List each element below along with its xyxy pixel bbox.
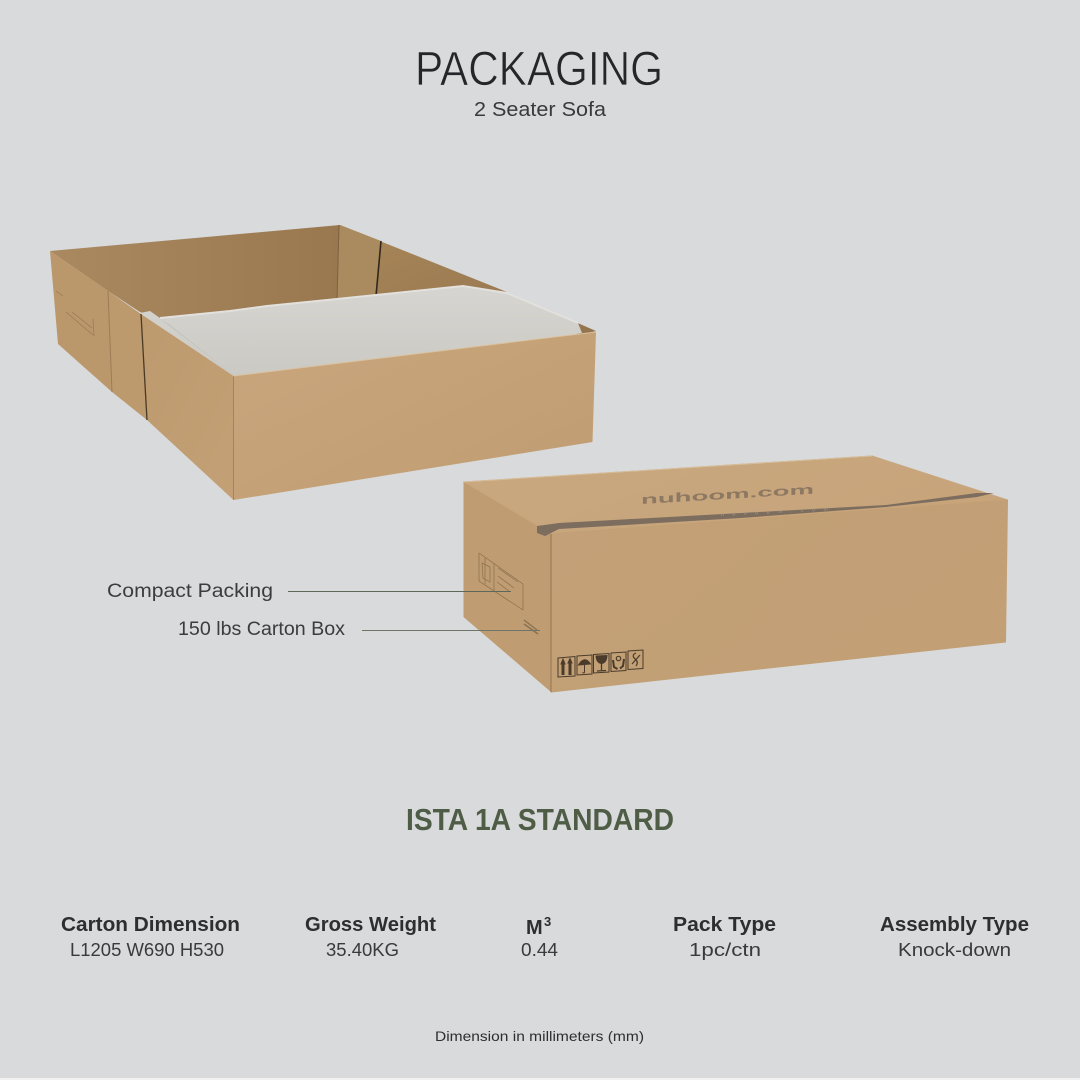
wrapped sofa sheet: [140, 286, 582, 376]
spec: cubic metres: M: [526, 917, 543, 939]
icon: this way up: [558, 656, 575, 677]
callout: carton box: 150 lbs Carton Box: [178, 619, 346, 640]
handling icons: [558, 650, 643, 677]
left side panels: [50, 251, 112, 392]
spec: cubic metres: [521, 914, 558, 960]
icon: keep dry: [577, 655, 592, 675]
box top: [464, 456, 1008, 534]
icon: handle with care: [611, 652, 626, 672]
footnote: Dimension in millimeters (mm): [435, 1028, 644, 1044]
side print marks: [56, 291, 94, 336]
spec: cubic metres: 3: [544, 914, 551, 929]
box left side: [464, 482, 551, 692]
tape print: nuhoom.com: [721, 506, 828, 518]
title: PACKAGING: [415, 43, 663, 96]
inner back wall: [50, 225, 340, 318]
spec: assembly type: Assembly Type: [880, 914, 1029, 936]
icon: fragile: [594, 654, 609, 673]
brand print on lid: nuhoom.com: [641, 483, 814, 507]
inner right wall: [337, 225, 596, 335]
spec: carton dimension: [61, 914, 240, 960]
spec: pack type: 1pc/ctn: [689, 939, 761, 960]
spec: pack type: [673, 914, 776, 960]
open carton box with wrapped sofa: [50, 225, 596, 500]
front panel: [234, 332, 596, 500]
standard heading: ISTA 1A STANDARD: [406, 802, 674, 837]
spec: gross weight: [305, 914, 436, 960]
spec: cubic metres: 0.44: [521, 939, 558, 960]
spec: carton dimension: Carton Dimension: [61, 914, 240, 936]
brown tape: [537, 493, 994, 536]
closed carton box: [464, 456, 1008, 692]
spec: pack type: Pack Type: [673, 914, 776, 936]
spec: assembly type: Knock-down: [898, 939, 1011, 960]
box front: [551, 500, 1008, 692]
icon: no hooks: [628, 650, 643, 670]
callout: compact packing: Compact Packing: [107, 581, 273, 602]
spec: gross weight: 35.40KG: [326, 939, 399, 960]
spec: gross weight: Gross Weight: [305, 914, 436, 936]
subtitle: 2 Seater Sofa: [474, 99, 607, 121]
spec: carton dimension: L1205 W690 H530: [70, 939, 224, 960]
spec: assembly type: [880, 914, 1029, 960]
side label: [479, 553, 538, 634]
